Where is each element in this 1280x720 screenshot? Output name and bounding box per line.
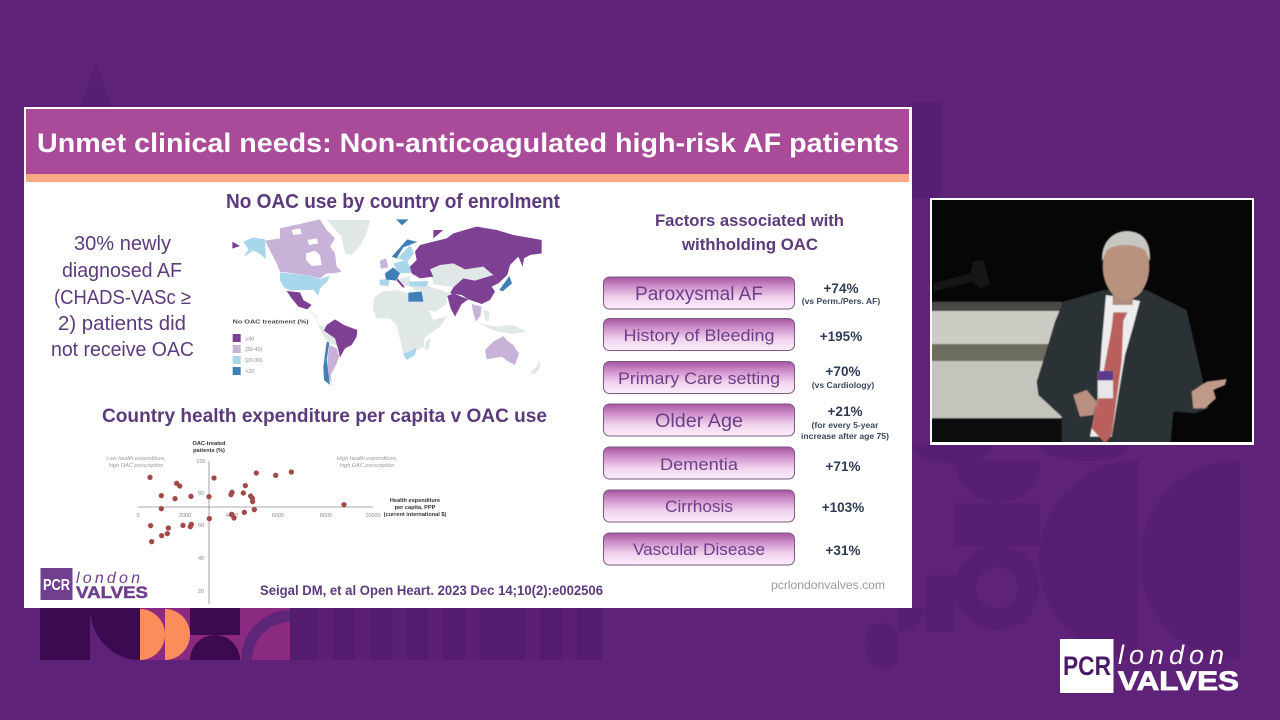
tick labels: 60 bbox=[198, 523, 204, 529]
bottom geometric strip bbox=[40, 608, 602, 660]
PCR London Valves logo: PCR bbox=[1063, 651, 1111, 681]
tick labels: 0 bbox=[136, 513, 140, 519]
y axis title: OAC-treated bbox=[193, 441, 226, 447]
tick labels: 100 bbox=[196, 459, 206, 465]
tick labels: 20 bbox=[198, 589, 204, 595]
citation: Seigal DM, et al Open Heart. 2023 Dec 14;10(2):e002506 bbox=[260, 582, 603, 598]
left statement bbox=[51, 233, 194, 361]
map legend: No OAC treatment (%) bbox=[233, 319, 309, 325]
factor values: (vs Perm./Pers. AF) bbox=[802, 296, 880, 306]
factor values: +103% bbox=[822, 500, 864, 515]
y axis title: patients (%) bbox=[193, 448, 225, 454]
slide logo: london bbox=[76, 570, 140, 587]
x axis title: per capita, PPP bbox=[395, 505, 436, 511]
PCR London Valves logo bbox=[1060, 639, 1239, 696]
scatter heading: Country health expenditure per capita v OAC use bbox=[102, 406, 547, 427]
left statement: 2) patients did bbox=[58, 313, 186, 335]
factor values: +21% bbox=[828, 404, 862, 419]
factor buttons bbox=[604, 277, 794, 565]
background decorative shapes bbox=[80, 60, 1240, 669]
factor values: +31% bbox=[826, 543, 860, 558]
map legend: [30-40) bbox=[245, 347, 262, 353]
quadrant note right: high OAC prescription bbox=[340, 463, 394, 469]
factor values: (vs Cardiology) bbox=[812, 380, 874, 390]
factor values: +70% bbox=[826, 364, 860, 379]
factor buttons: Cirrhosis bbox=[665, 497, 733, 516]
left statement: diagnosed AF bbox=[62, 260, 182, 282]
PCR London Valves logo: VALVES bbox=[1118, 666, 1239, 696]
slide background bbox=[24, 107, 912, 608]
scatter chart bbox=[106, 441, 447, 604]
factors heading: Factors associated with bbox=[655, 211, 844, 230]
map heading: No OAC use by country of enrolment bbox=[226, 191, 560, 213]
tick labels: 80 bbox=[198, 491, 204, 497]
x axis title: (current international $) bbox=[384, 512, 447, 518]
data points bbox=[147, 469, 347, 544]
world map bbox=[232, 219, 542, 385]
tick labels: 10000 bbox=[365, 513, 381, 519]
map legend: ≥40 bbox=[245, 336, 254, 342]
factor values: +74% bbox=[824, 281, 858, 296]
left statement: (CHADS-VASc ≥ bbox=[54, 287, 191, 309]
orange stripe bbox=[26, 174, 909, 182]
factor values: +71% bbox=[826, 459, 860, 474]
factor values: (for every 5-year bbox=[812, 420, 879, 430]
factors heading: withholding OAC bbox=[681, 235, 818, 254]
factor buttons: Primary Care setting bbox=[618, 369, 780, 388]
map legend: <20 bbox=[245, 369, 254, 375]
factor values bbox=[801, 281, 889, 558]
slide panel bbox=[24, 107, 912, 608]
tick labels: 2000 bbox=[179, 513, 191, 519]
axes bbox=[138, 461, 373, 604]
factor values: increase after age 75) bbox=[801, 431, 889, 441]
left statement: 30% newly bbox=[74, 233, 171, 255]
factor values: +195% bbox=[820, 329, 862, 344]
quadrant notes: Low health expenditure, bbox=[106, 456, 166, 462]
video panel: speaker bbox=[930, 198, 1254, 445]
left statement: not receive OAC bbox=[51, 339, 194, 361]
map legend: [20-30) bbox=[245, 358, 262, 364]
slide logo: PCR bbox=[43, 577, 70, 594]
x axis title: Health expenditure bbox=[390, 498, 440, 504]
header band bbox=[26, 109, 909, 174]
tick labels: 4000 bbox=[226, 513, 238, 519]
map legend bbox=[233, 319, 309, 375]
speaker figure bbox=[1037, 231, 1227, 443]
tick labels: 6000 bbox=[272, 513, 284, 519]
slide logo bbox=[40, 568, 148, 602]
background equipment bbox=[933, 260, 990, 292]
slide logo: VALVES bbox=[76, 583, 148, 602]
quadrant note right: High health expenditure, bbox=[337, 456, 397, 462]
tick labels: 8000 bbox=[320, 513, 332, 519]
stage wall bands bbox=[930, 302, 1066, 442]
tick labels: 40 bbox=[198, 556, 204, 562]
tick labels bbox=[136, 459, 381, 595]
factor buttons: Vascular Disease bbox=[633, 540, 765, 559]
factor buttons: Paroxysmal AF bbox=[635, 284, 763, 305]
title: Unmet clinical needs: Non-anticoagulated high-risk AF patients bbox=[37, 128, 899, 158]
PCR London Valves logo: london bbox=[1118, 640, 1224, 670]
factor buttons: Dementia bbox=[660, 455, 739, 474]
website: pcrlondonvalves.com bbox=[771, 578, 885, 592]
factor buttons: Older Age bbox=[655, 411, 743, 432]
quadrant notes: high OAC prescription bbox=[109, 463, 163, 469]
factor buttons: History of Bleeding bbox=[624, 326, 774, 345]
